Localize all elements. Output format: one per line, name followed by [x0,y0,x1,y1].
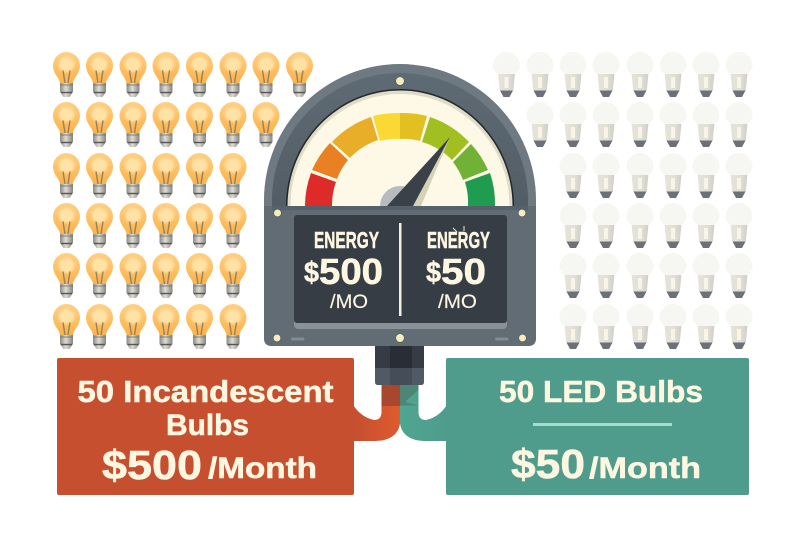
display screen [294,215,507,323]
display: LED reading: ENERGY [427,227,490,253]
heading: second line: Bulbs [166,409,249,442]
display: LED reading: /MO [438,292,477,313]
pipe: LED [400,385,448,441]
display: incandescent reading: ENERGY [314,227,379,253]
heading: LED bulbs: 50 LED Bulbs [499,374,703,409]
panel: incandescent cost with pipe [57,358,400,495]
price: 50 dollars: $50 [511,441,585,487]
display lip [294,316,507,329]
connector [375,346,424,406]
dial face [286,89,514,206]
meter housing [264,64,536,346]
display: LED reading: 50 [441,251,486,292]
needle hub [380,186,420,206]
display: incandescent reading: $ [304,257,319,289]
lower panel [264,206,536,346]
display: incandescent reading: 500 [319,251,383,292]
divider line [533,423,672,426]
pipe: incandescent [352,385,400,441]
display: LED reading [426,226,490,313]
price: 500 dollars: $500 [102,442,202,488]
heading: incandescent bulbs: 50 Incandescent [78,374,334,409]
display divider [399,223,402,316]
gauge scale [305,113,495,206]
housing inner band [272,73,528,206]
icon grid: incandescent bulbs [53,52,313,349]
screws and vents [273,77,526,342]
panel: LED cost with pipe [400,358,749,495]
display: incandescent reading [304,227,383,313]
needle [387,137,450,206]
display: LED reading: $ [426,257,441,289]
energy meter [264,64,536,346]
price unit: per month: /Month [589,452,701,485]
icon grid: LED bulbs [493,52,752,349]
price unit: per month: /Month [208,452,317,485]
display: incandescent reading: /MO [330,292,368,313]
